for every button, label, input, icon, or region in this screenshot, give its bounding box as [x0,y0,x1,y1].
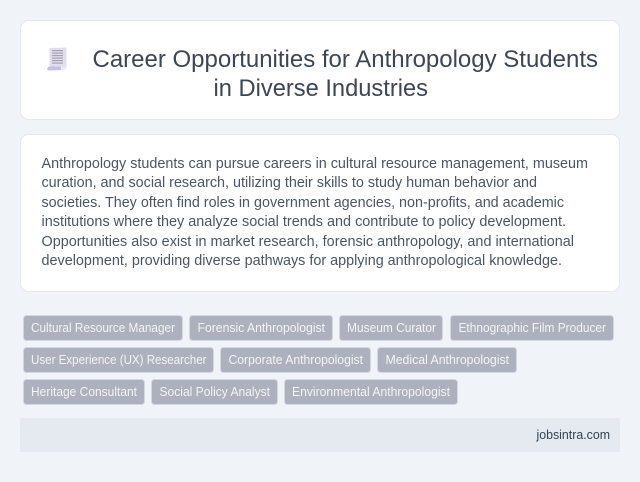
tag: User Experience (UX) Researcher [24,348,214,372]
footer bar [20,418,620,452]
tag: Museum Curator: Museum Curator [347,320,437,335]
tag: Museum Curator [340,316,442,340]
text block: summary paragraph: societies. They often find roles in government agencies, non-profits, and academic [42,195,565,211]
text block: summary paragraph: Opportunities also exist in market research, forensic anthropology, and international [42,234,574,250]
tag: Ethnographic Film Producer [450,316,614,340]
panel: summary card [20,134,620,292]
tag: Cultural Resource Manager [24,316,182,340]
tag: Medical Anthropologist: Medical Anthropologist [386,352,509,367]
tag: Heritage Consultant [24,380,144,404]
tag: Forensic Anthropologist: Forensic Anthropologist [198,320,325,335]
panel: title card [20,20,620,120]
tag: Corporate Anthropologist: Corporate Anthropologist [228,352,363,367]
icon: document scroll [47,48,66,70]
tag: User Experience (UX) Researcher: User Experience (UX) Researcher [31,352,207,367]
heading: Career Opportunities for Anthropology Students [92,46,598,73]
tag: Social Policy Analyst [152,380,278,404]
tag: Ethnographic Film Producer: Ethnographic Film Producer [458,320,607,335]
heading: in Diverse Industries [214,75,428,102]
text block: summary paragraph [42,156,588,269]
text block: summary paragraph: Anthropology students can pursue careers in cultural resource management, museum [42,156,588,172]
tag: Medical Anthropologist [378,348,516,372]
footer source text: jobsintra.com [536,427,610,442]
heading [92,46,598,102]
text block: summary paragraph: curation, and social research, utilizing their skills to study human behavior and [42,175,537,191]
tag: Forensic Anthropologist [190,316,332,340]
tag: Corporate Anthropologist [220,348,370,372]
tag: Heritage Consultant: Heritage Consultant [31,384,137,399]
tag: Social Policy Analyst: Social Policy Analyst [160,384,270,399]
tag: Cultural Resource Manager: Cultural Resource Manager [31,320,176,335]
text block: summary paragraph: institutions where they analyze social trends and contribute to policy development. [42,214,566,230]
panel: career tags [24,316,614,404]
tag: Environmental Anthropologist [284,380,458,404]
text block: summary paragraph: development, providing diverse pathways for applying anthropological knowledge. [42,253,562,269]
tag: Environmental Anthropologist: Environmental Anthropologist [292,384,450,399]
